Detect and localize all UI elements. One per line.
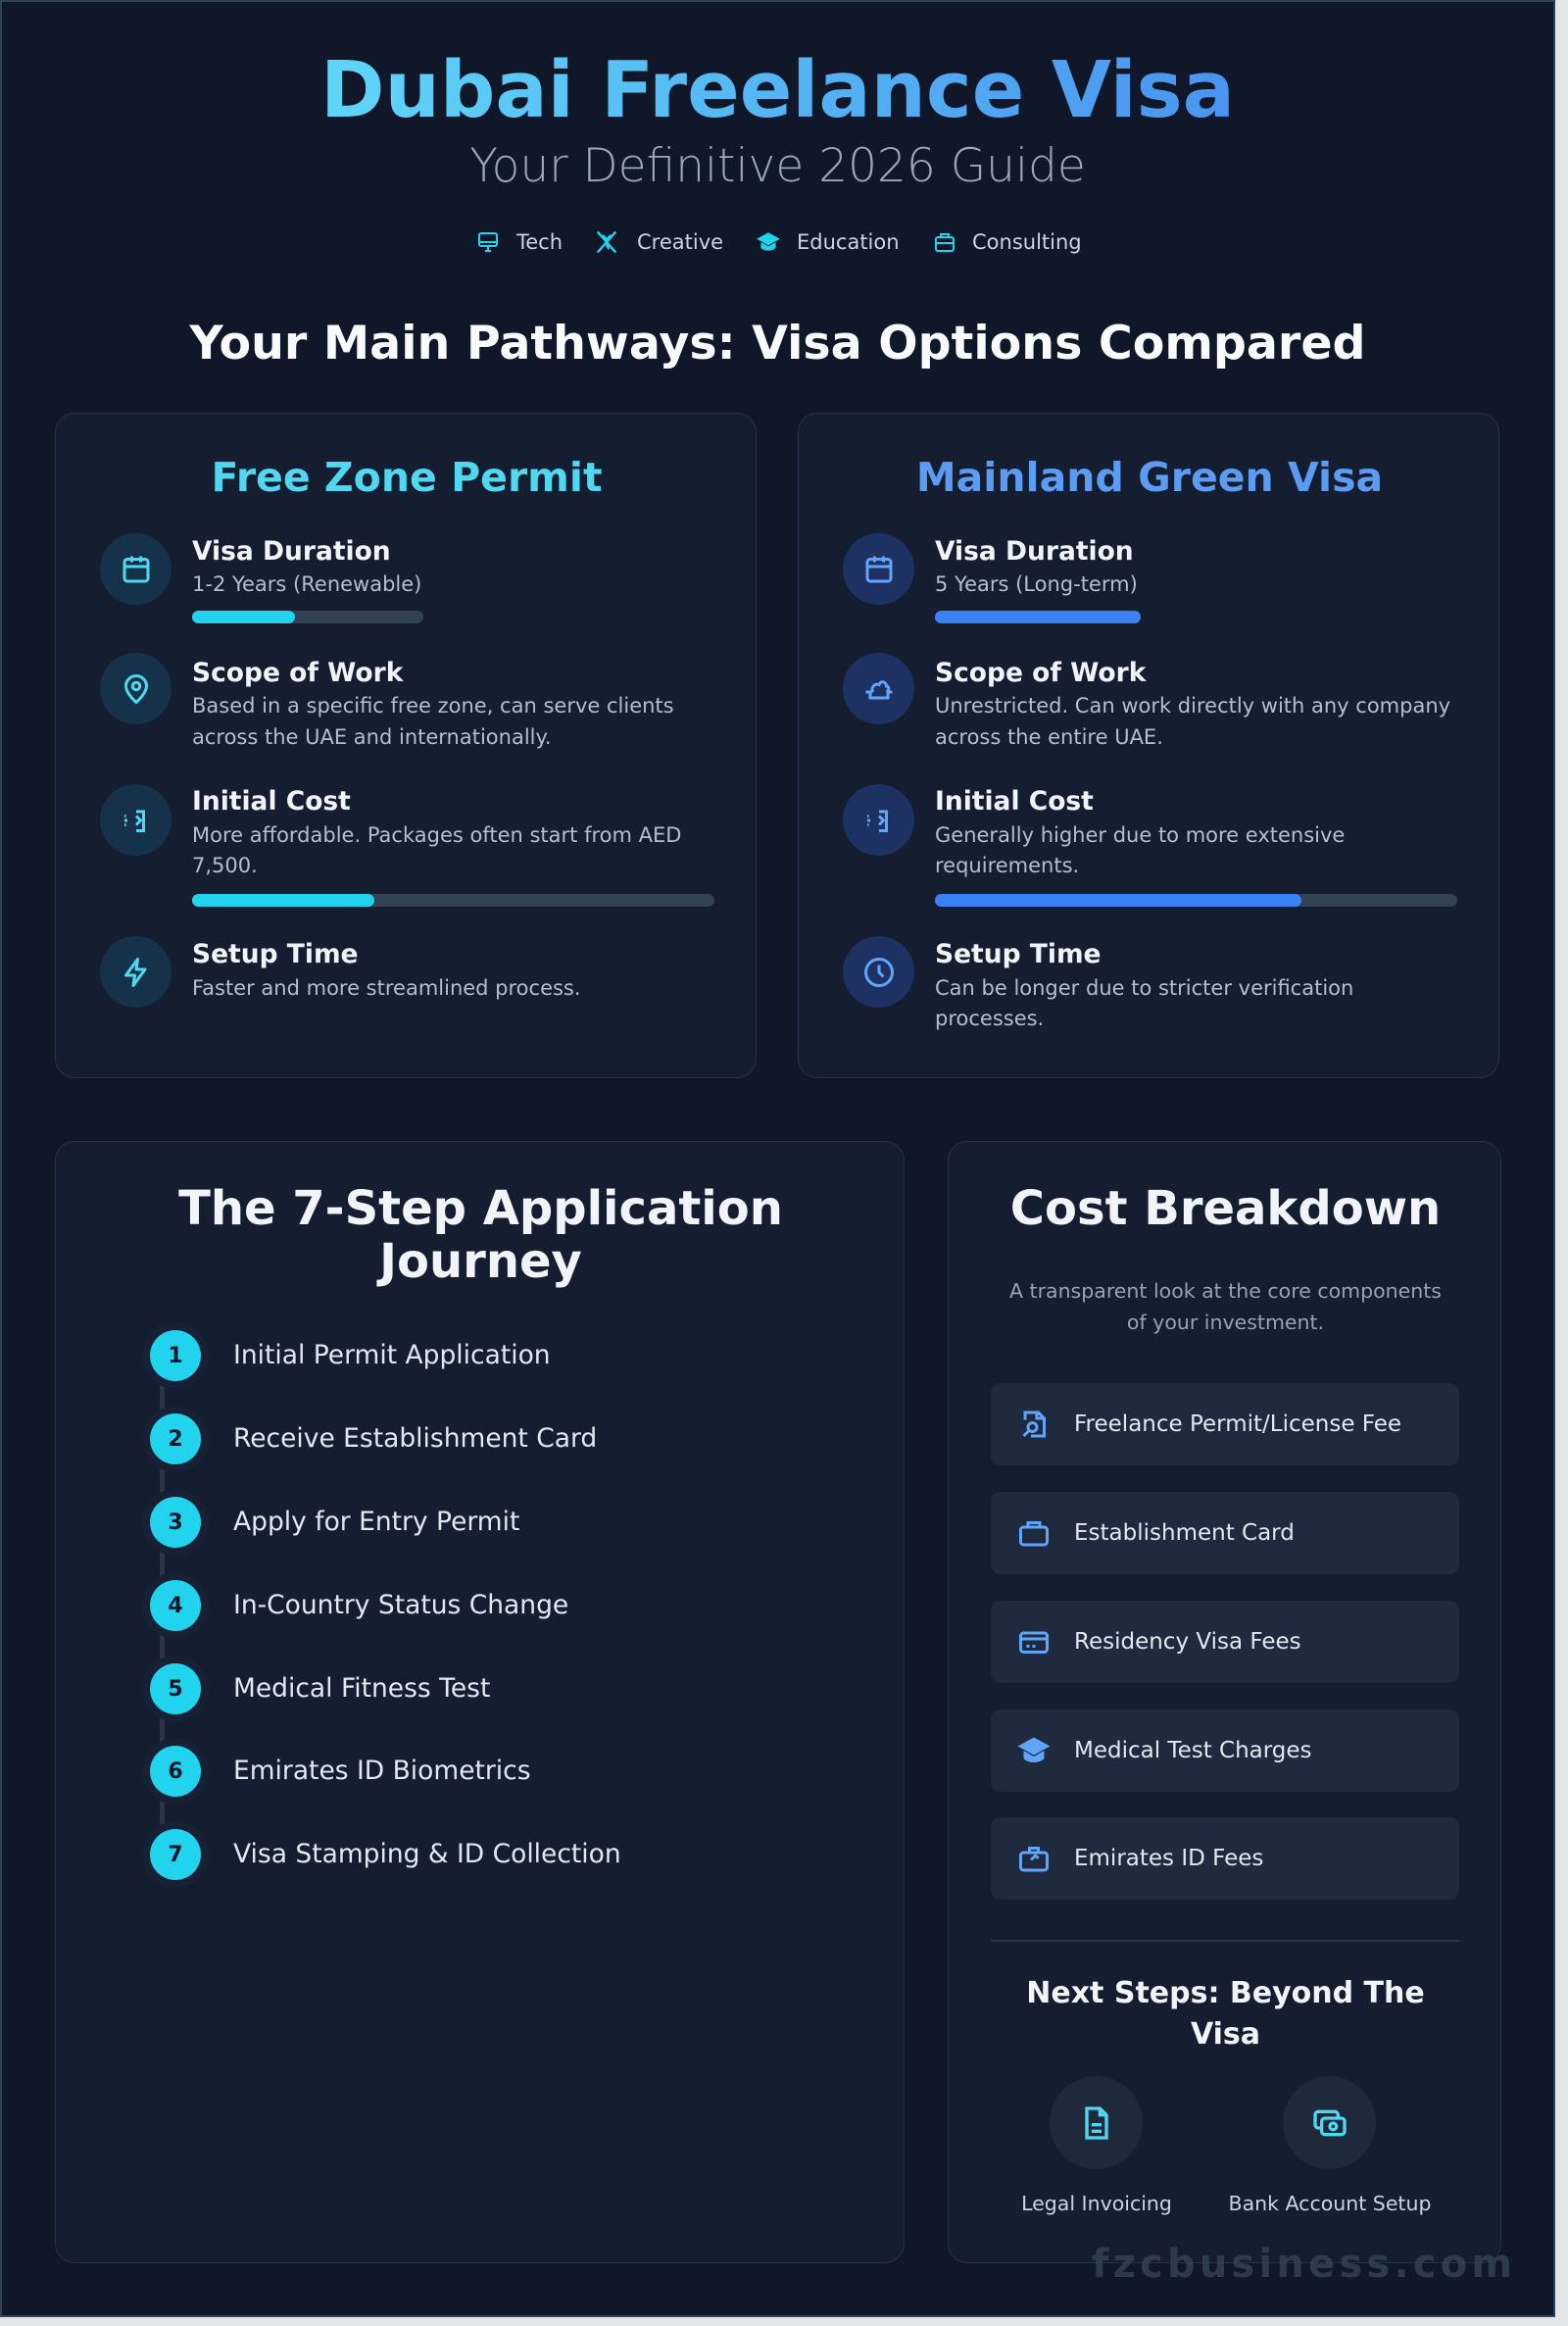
step 5: 5 [168,1676,183,1702]
tag: tech [478,230,563,254]
item: scope of work: Based in a specific free zone, can serve clients [192,694,674,718]
cost item: establishment card [991,1492,1459,1574]
tags row [478,230,1082,254]
item: initial cost [843,784,1457,907]
item: scope of work: across the entire UAE. [935,725,1163,749]
item: visa duration [843,533,1141,623]
title: Dubai Freelance Visa [320,45,1235,135]
panel heading: Mainland Green Visa [916,454,1383,501]
section heading: Your Main Pathways: Visa Options Compared [189,317,1366,371]
panel heading: Journey [379,1234,582,1289]
cost item: emirates id [991,1817,1459,1900]
step 1: Initial Permit Application [233,1340,551,1370]
step 7: Visa Stamping & ID Collection [233,1839,621,1869]
tag: tech: Tech [516,230,563,254]
cost item: medical test: Medical Test Charges [1074,1738,1312,1763]
subtitle text: A transparent look at the core components [1009,1279,1442,1303]
item: initial cost: requirements. [935,854,1079,877]
cost item: emirates id: Emirates ID Fees [1074,1846,1263,1871]
panel: free zone permit [55,413,757,1078]
next steps heading: Visa [1191,2017,1260,2052]
cost item: medical test [991,1709,1459,1792]
item: setup time: processes. [935,1007,1044,1030]
cost item: permit fee: Freelance Permit/License Fee [1074,1411,1401,1437]
panel heading: The 7-Step Application [178,1181,783,1236]
next steps heading: Next Steps: Beyond The [1026,1976,1425,2010]
item: scope of work [100,653,674,749]
cost item: residency visa: Residency Visa Fees [1074,1629,1301,1655]
tag: creative: Creative [637,230,723,254]
item: initial cost [100,784,714,907]
step 5 [150,1658,490,1720]
item: setup time: Faster and more streamlined process. [192,976,581,1000]
step 7: 7 [168,1843,183,1866]
step 3: Apply for Entry Permit [233,1507,519,1537]
item: scope of work: across the UAE and internationally. [192,725,552,749]
step 1 [150,1330,551,1387]
tag: consulting: Consulting [972,230,1082,254]
item: initial cost: Initial Cost [935,786,1094,817]
item: visa duration: Visa Duration [935,536,1134,567]
tag: creative [596,230,723,254]
next step: legal invoicing: Legal Invoicing [1021,2192,1172,2215]
step 2 [150,1408,597,1470]
step 1: 1 [168,1343,183,1368]
step 2: Receive Establishment Card [233,1423,597,1454]
next step: bank account [1229,2076,1431,2215]
item: initial cost: More affordable. Packages often start from AED [192,823,681,847]
next step: bank account: Bank Account Setup [1229,2192,1431,2215]
panel: 7-step journey [55,1141,905,2263]
item: setup time [843,936,1353,1030]
item: scope of work: Scope of Work [192,658,403,688]
item: setup time [100,936,581,1008]
step 5: Medical Fitness Test [233,1673,490,1704]
item: scope of work: Scope of Work [935,658,1146,688]
cost item: residency visa [991,1601,1459,1683]
panel: cost breakdown [948,1141,1501,2263]
panel heading: Free Zone Permit [211,454,603,501]
subtitle text: of your investment. [1127,1311,1324,1334]
item: setup time: Can be longer due to stricter verification [935,976,1353,1000]
step 3 [150,1491,519,1554]
subtitle: Your Definitive 2026 Guide [469,139,1086,193]
item: scope of work [843,653,1450,749]
next steps heading [1026,1976,1425,2052]
item: visa duration: 5 Years (Long-term) [935,572,1138,596]
item: initial cost: Generally higher due to more extensive [935,823,1345,847]
item: setup time: Setup Time [935,939,1102,969]
cost item: establishment card: Establishment Card [1074,1520,1295,1546]
step 4: In-Country Status Change [233,1590,568,1620]
panel heading [178,1181,783,1289]
step 6 [150,1740,531,1803]
subtitle text [1009,1279,1442,1334]
watermark: fzcbusiness.com [1092,2242,1516,2287]
next step: legal invoicing [1021,2076,1172,2215]
step 7 [150,1823,621,1880]
item: initial cost: 7,500. [192,854,258,877]
step 6: Emirates ID Biometrics [233,1756,531,1786]
tag: education: Education [797,230,900,254]
item: initial cost: Initial Cost [192,786,351,817]
panel heading: Cost Breakdown [1010,1181,1441,1236]
timeline line [160,1377,165,1848]
cost item: permit fee [991,1383,1459,1465]
step 6: 6 [168,1758,183,1784]
item: visa duration [100,533,423,623]
step 2: 2 [168,1427,183,1451]
divider [991,1940,1459,1942]
step 4 [150,1574,568,1637]
item: visa duration: 1-2 Years (Renewable) [192,572,421,596]
step 4: 4 [168,1594,183,1617]
item: scope of work: Unrestricted. Can work directly with any company [935,694,1450,718]
step 3: 3 [168,1509,183,1535]
panel: mainland green visa [798,413,1499,1078]
item: visa duration: Visa Duration [192,536,391,567]
item: setup time: Setup Time [192,939,359,969]
